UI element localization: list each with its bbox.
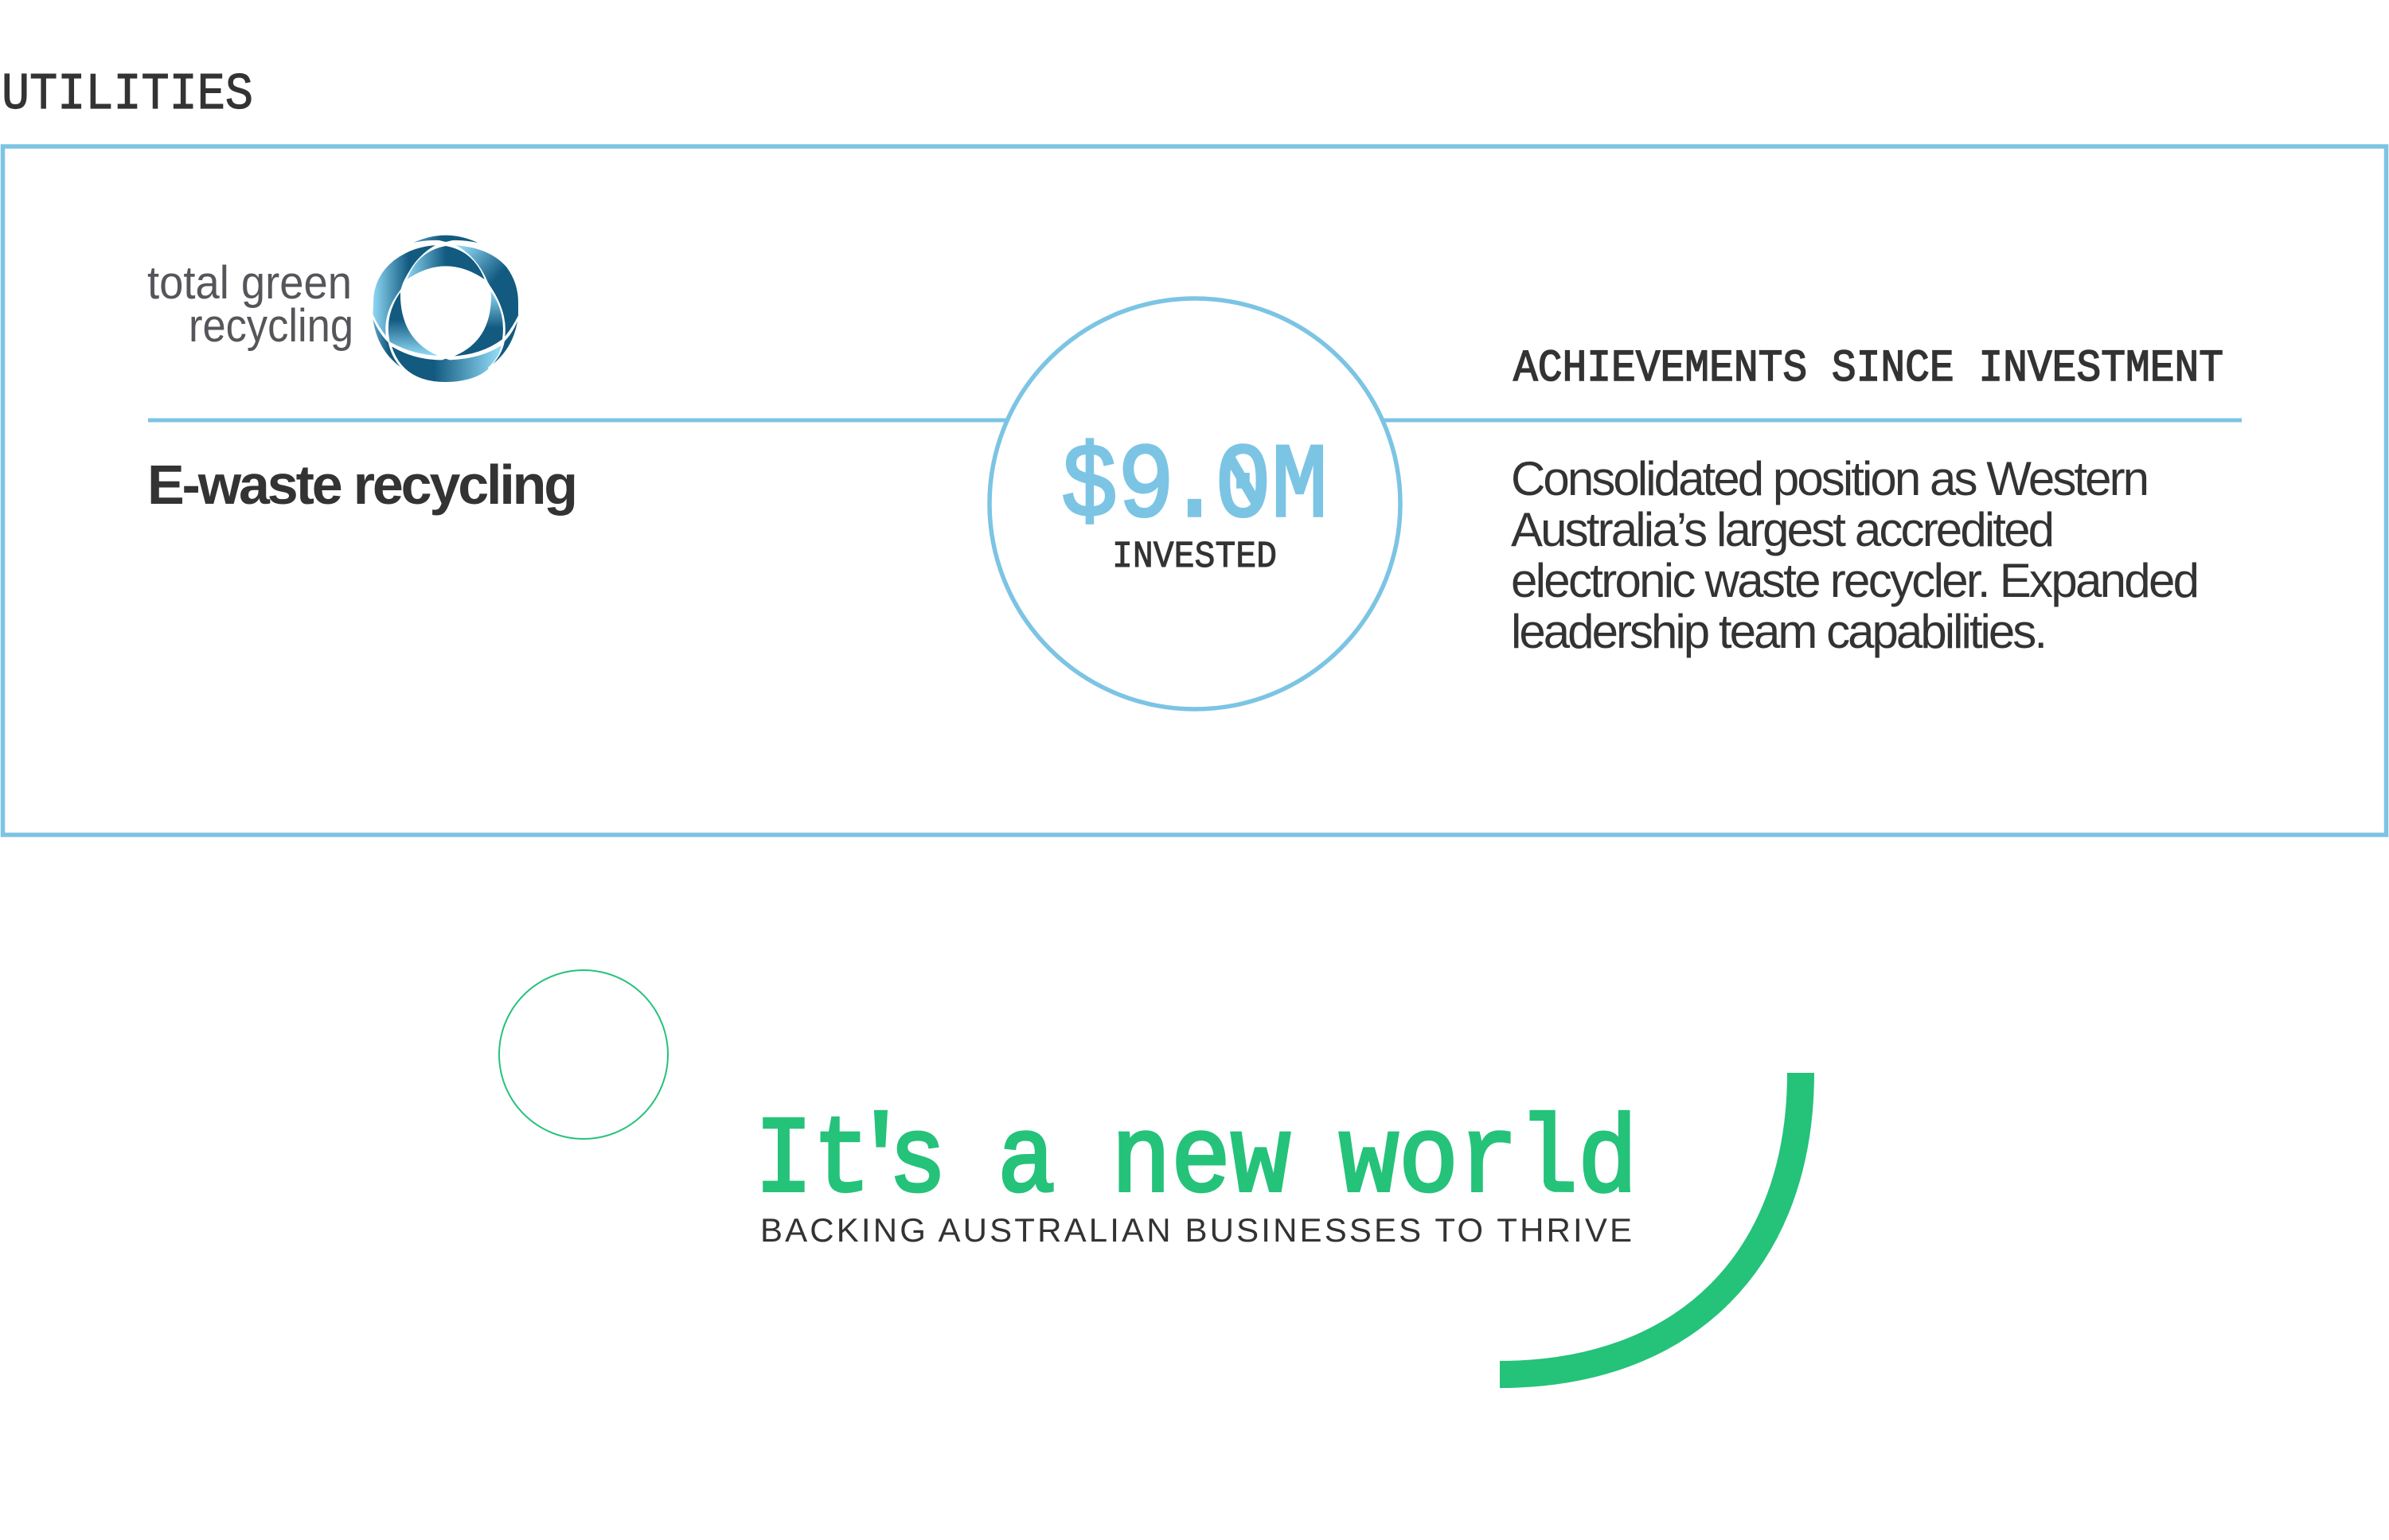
achievements text: electronic waste recycler. Expanded <box>1511 554 2200 607</box>
footer title: world <box>1339 1101 1638 1224</box>
decorative green circle <box>499 970 668 1139</box>
logo wordmark: recycling <box>189 300 353 352</box>
achievements text: leadership team capabilities. <box>1511 605 2047 658</box>
section heading: utilities: UTILITIES <box>2 65 253 124</box>
footer title: ' <box>852 1101 910 1224</box>
logo wordmark: total green <box>147 257 352 309</box>
footer title: It <box>755 1101 871 1224</box>
footer title: new <box>1111 1101 1290 1224</box>
panel: company investment card <box>3 146 2387 835</box>
logo: total green recycling <box>147 235 519 383</box>
achievements heading: ACHIEVEMENTS SINCE INVESTMENT <box>1513 344 2223 395</box>
footer title: s <box>888 1101 947 1224</box>
invested label: INVESTED <box>1112 536 1277 579</box>
investment circle <box>990 298 1400 709</box>
investment amount <box>1061 427 1328 548</box>
footer title: a <box>997 1101 1056 1224</box>
logo wordmark <box>147 257 353 352</box>
icon: recycling ring <box>372 235 519 383</box>
footer tagline: BACKING AUSTRALIAN BUSINESSES TO THRIVE <box>760 1211 1632 1249</box>
investment amount: $9 <box>1061 427 1174 548</box>
footer title <box>755 1101 1638 1224</box>
investment amount: 0M <box>1215 427 1328 548</box>
green quarter arc <box>1500 1073 1801 1374</box>
divider line with circle gap <box>148 419 2242 422</box>
company sector label: E-waste recycling <box>147 454 578 516</box>
investment amount: . <box>1165 427 1224 548</box>
achievements text <box>1511 452 2200 658</box>
achievements text: Consolidated position as Western <box>1511 452 2149 505</box>
achievements text: Australia’s largest accredited <box>1511 503 2055 556</box>
